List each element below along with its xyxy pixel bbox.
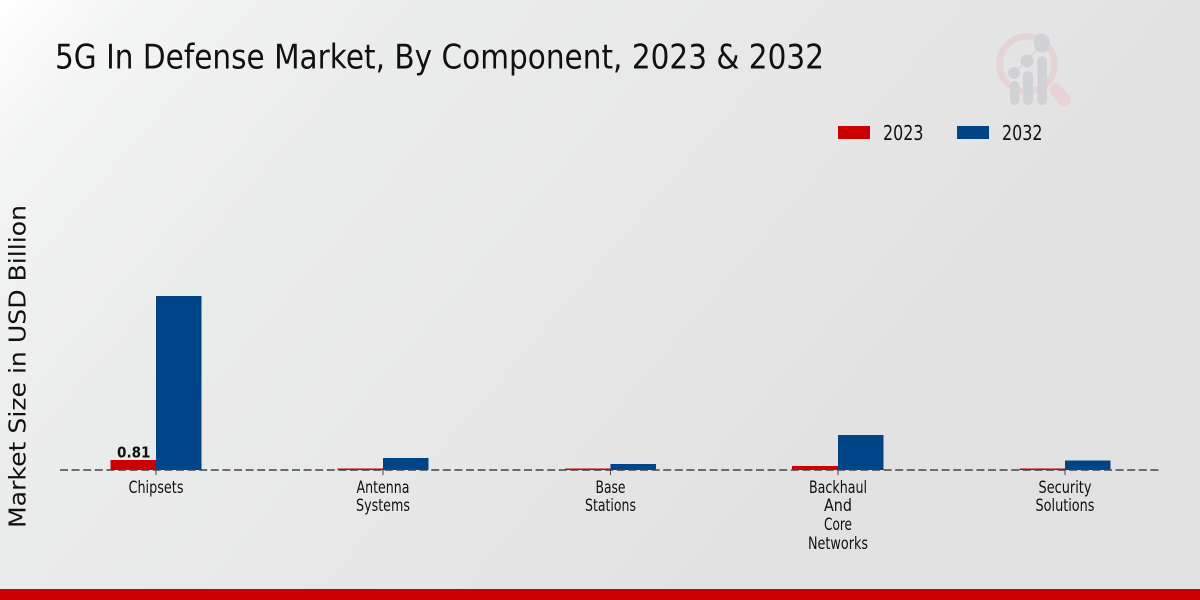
y axis label: Market Size in USD Billion bbox=[4, 205, 32, 528]
bottom red band bbox=[0, 589, 1200, 600]
label: Chipsets: Chipsets bbox=[128, 478, 184, 498]
label: Base Stations: Stations bbox=[585, 496, 636, 516]
value label: 0.81: 0.81 bbox=[117, 444, 150, 462]
bars: Base Stations bbox=[565, 464, 656, 470]
label: Backhaul And Core Networks bbox=[808, 478, 868, 554]
legend item: 2032 bbox=[957, 121, 1042, 145]
label: Security Solutions: Solutions bbox=[1036, 496, 1095, 516]
bars: Security Solutions bbox=[1020, 460, 1110, 470]
label: Base Stations bbox=[585, 478, 636, 516]
label: Backhaul And Core Networks: Core bbox=[824, 515, 852, 535]
label: Security Solutions: Security bbox=[1038, 478, 1092, 498]
legend item: 2023: 2023 bbox=[883, 121, 924, 145]
legend item: 2023 bbox=[838, 121, 924, 145]
label: Antenna Systems: Antenna bbox=[356, 478, 410, 498]
label: Antenna Systems: Systems bbox=[356, 496, 410, 516]
bars: Backhaul And Core Networks bbox=[792, 435, 884, 470]
bars: Chipsets bbox=[110, 296, 202, 470]
bar chart bbox=[60, 296, 1160, 475]
x axis labels bbox=[128, 478, 1095, 554]
label: Antenna Systems bbox=[356, 478, 410, 516]
bars: Antenna Systems bbox=[338, 458, 428, 470]
legend bbox=[838, 121, 1042, 145]
label: Security Solutions bbox=[1036, 478, 1095, 516]
label: Backhaul And Core Networks: Networks bbox=[808, 534, 868, 554]
label: Backhaul And Core Networks: And bbox=[824, 496, 852, 516]
label: Base Stations: Base bbox=[596, 478, 626, 498]
label: Backhaul And Core Networks: Backhaul bbox=[809, 478, 867, 498]
logo watermark: magnifier with rising bars bbox=[1000, 34, 1064, 105]
legend item: 2032: 2032 bbox=[1002, 121, 1042, 145]
title: 5G In Defense Market, By Component, 2023 & 2032 bbox=[55, 38, 824, 78]
